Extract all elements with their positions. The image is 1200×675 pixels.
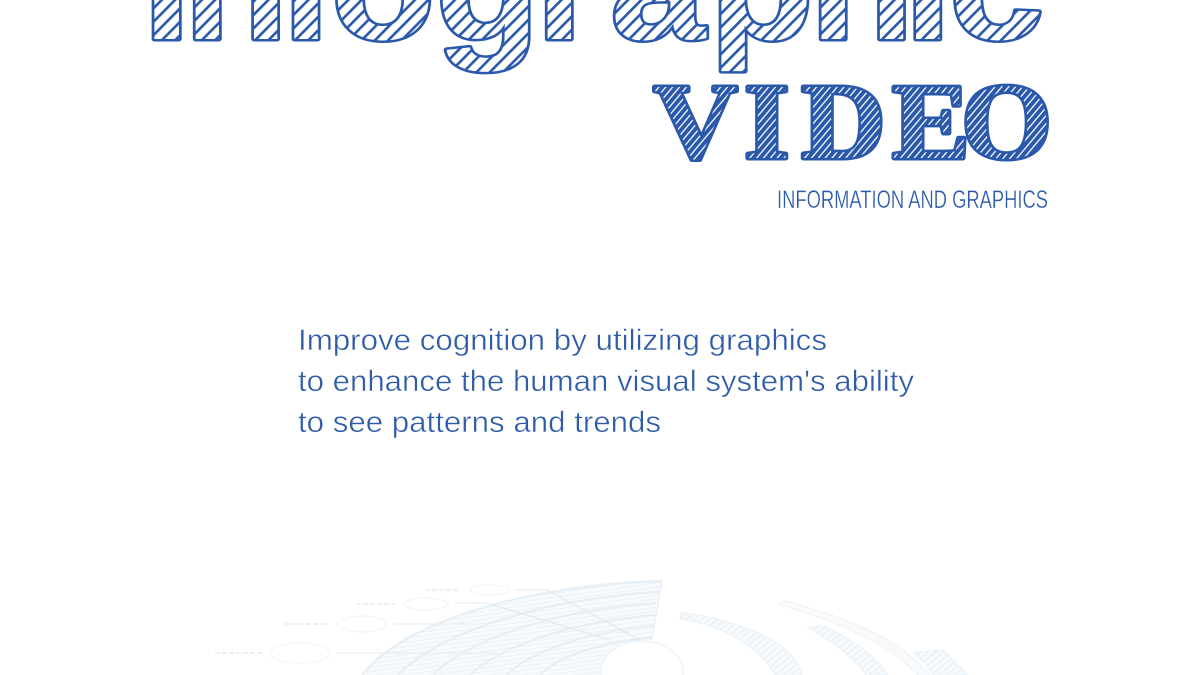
- faded radial chart graphic: [215, 581, 968, 675]
- right arc band 1: [680, 612, 802, 675]
- subtitle: INFORMATION AND GRAPHICS: [777, 186, 1048, 214]
- title: VIDEO: VIDEO: [653, 63, 1052, 182]
- right arc band 3: [808, 625, 888, 675]
- callout markers: [215, 585, 547, 663]
- right arc band 2: [778, 601, 930, 675]
- left sector rings: [362, 581, 662, 675]
- body text: to see patterns and trends: [298, 406, 661, 439]
- body text: Improve cognition by utilizing graphics: [298, 324, 827, 357]
- inner circle: [601, 641, 683, 675]
- body text: to enhance the human visual system's ability: [298, 365, 914, 398]
- body text: [298, 324, 914, 439]
- right arc band 4: [914, 650, 968, 675]
